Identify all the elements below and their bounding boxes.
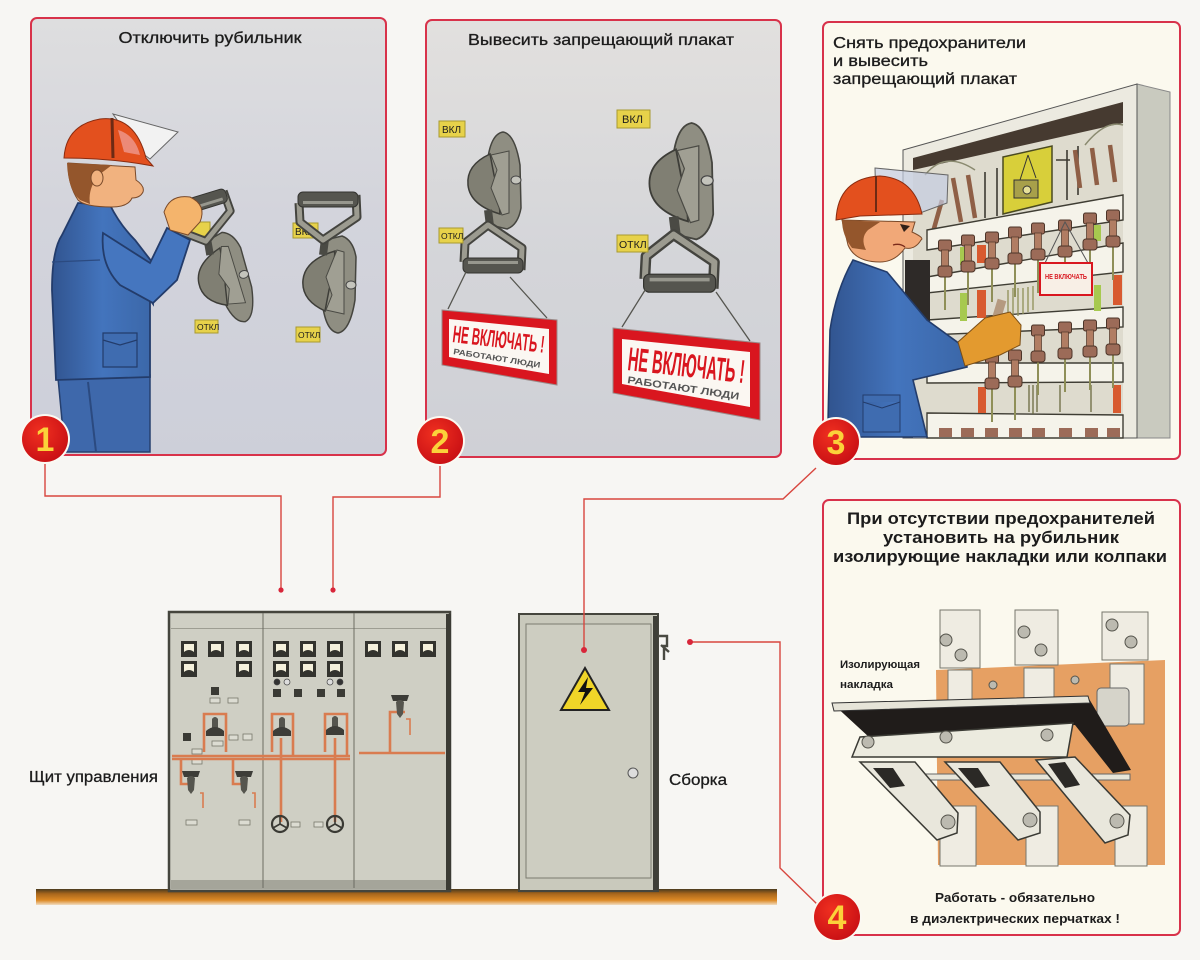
left placard: НЕ ВКЛЮЧАТЬ ! (451, 321, 546, 359)
badge 1: 1 (36, 421, 54, 459)
lock with key (658, 636, 669, 660)
label: insulating cover: Изолирующая (840, 659, 920, 671)
connector lines (45, 462, 818, 905)
label: insulating cover: накладка (840, 679, 894, 691)
note: gloves: Работать - обязательно (935, 891, 1095, 905)
cross bar (852, 723, 1073, 757)
tags: ВКЛ (442, 125, 461, 136)
small placard (1040, 222, 1092, 295)
jacket (828, 260, 967, 437)
hair (67, 163, 112, 204)
badge 4: 4 (828, 899, 847, 937)
upper busbars (940, 610, 1148, 724)
pocket (863, 395, 900, 432)
arm (103, 228, 190, 303)
eye and mouth (900, 224, 910, 232)
helmet (64, 119, 153, 166)
relay bars (933, 145, 1115, 232)
tag ОТКЛ right (296, 327, 320, 342)
panel 4 heading: установить на рубильник (883, 529, 1120, 547)
left placard (442, 310, 557, 385)
visor (875, 168, 948, 213)
door knob (628, 768, 638, 778)
badge 2: 2 (431, 423, 449, 461)
visor (113, 114, 178, 159)
panel 1 heading: Отключить рубильник (118, 30, 303, 47)
tags: ВКЛ (622, 114, 643, 126)
blades (860, 757, 1130, 843)
control wheels (272, 816, 343, 832)
tags: ОТКЛ (441, 231, 463, 241)
helmet (836, 176, 922, 220)
copper back plate (936, 660, 1165, 865)
left switch, handle toward hand (170, 188, 264, 333)
warning sign (561, 668, 609, 710)
badge 4 (812, 892, 862, 942)
small placard: НЕ ВКЛЮЧАТЬ (1045, 274, 1087, 281)
strings (448, 272, 750, 341)
face (68, 163, 143, 207)
bolts (940, 619, 1137, 689)
badge 3 (811, 417, 861, 467)
tag ВКЛ right (293, 223, 318, 238)
note: gloves: в диэлектрических перчатках ! (910, 912, 1120, 926)
jacket (52, 203, 153, 380)
blade bolts (941, 813, 1124, 829)
worker 1 (52, 114, 202, 452)
horizontal rod (915, 774, 1130, 780)
panel 2: hang placard: НЕ ВКЛЮЧАТЬ ! (626, 340, 747, 390)
control board (169, 612, 451, 891)
tag ОТКЛ right: ОТКЛ (298, 330, 320, 340)
panel 3 heading: Снять предохранители (833, 35, 1026, 52)
rails (927, 195, 1123, 438)
fuse in hand (996, 300, 1002, 320)
tags: ОТКЛ (619, 239, 647, 251)
worker 3 (828, 168, 1021, 437)
face (842, 220, 922, 262)
trousers (58, 375, 150, 452)
left placard: РАБОТАЮТ ЛЮДИ (453, 347, 541, 370)
panel 4 heading: изолирующие накладки или колпаки (833, 548, 1167, 566)
right switch, handle up (298, 192, 358, 333)
switch icons (182, 695, 409, 794)
panel 3: remove fuses (823, 22, 1180, 459)
mimic bus lines (172, 712, 445, 822)
colored bars (960, 225, 1122, 413)
indicator lamps (274, 679, 343, 685)
label: control board: Щит управления (29, 769, 158, 786)
badge 1 (20, 414, 70, 464)
jacket pocket (103, 333, 137, 367)
hand (164, 197, 202, 235)
label: assembly: Сборка (669, 772, 727, 789)
wire bundle (1008, 286, 1033, 316)
panel 3 heading: и вывесить (833, 53, 928, 70)
tag ОТКЛ left: ОТКЛ (197, 322, 219, 332)
lower busbars (940, 806, 1147, 866)
right placard: РАБОТАЮТ ЛЮДИ (627, 375, 740, 403)
relay frames (985, 146, 1078, 218)
right placard (613, 328, 760, 420)
connector dots (278, 587, 693, 653)
panel 2 heading: Вывесить запрещающий плакат (468, 32, 735, 49)
left switch (463, 132, 523, 273)
assembly cabinet (519, 614, 669, 891)
badge 2 (415, 416, 465, 466)
note: gloves (910, 891, 1120, 926)
tags (439, 110, 650, 252)
blade openings (873, 762, 1080, 788)
cabinet (903, 84, 1170, 438)
floor (36, 889, 777, 905)
hair (842, 220, 880, 250)
panel 3 heading (833, 35, 1026, 88)
label: insulating cover (840, 659, 920, 691)
panel 4: insulating covers (823, 500, 1180, 935)
panel 4 heading: При отсутствии предохранителей (847, 510, 1155, 528)
panel 1: switch off (31, 18, 386, 455)
tag ВКЛ right: ВКЛ (295, 227, 314, 238)
fuses (938, 210, 1120, 437)
panel 2: hang placard (426, 20, 781, 457)
tag ВКЛ left (188, 222, 210, 236)
yellow relay (1003, 146, 1052, 214)
panel 3 heading: запрещающий плакат (833, 71, 1017, 88)
badge 3: 3 (827, 424, 845, 462)
panel 4 heading (833, 510, 1167, 566)
meters (181, 641, 436, 677)
right switch (644, 123, 716, 292)
glove (958, 312, 1021, 366)
label plates (186, 698, 323, 827)
insulating plate (832, 696, 1131, 773)
